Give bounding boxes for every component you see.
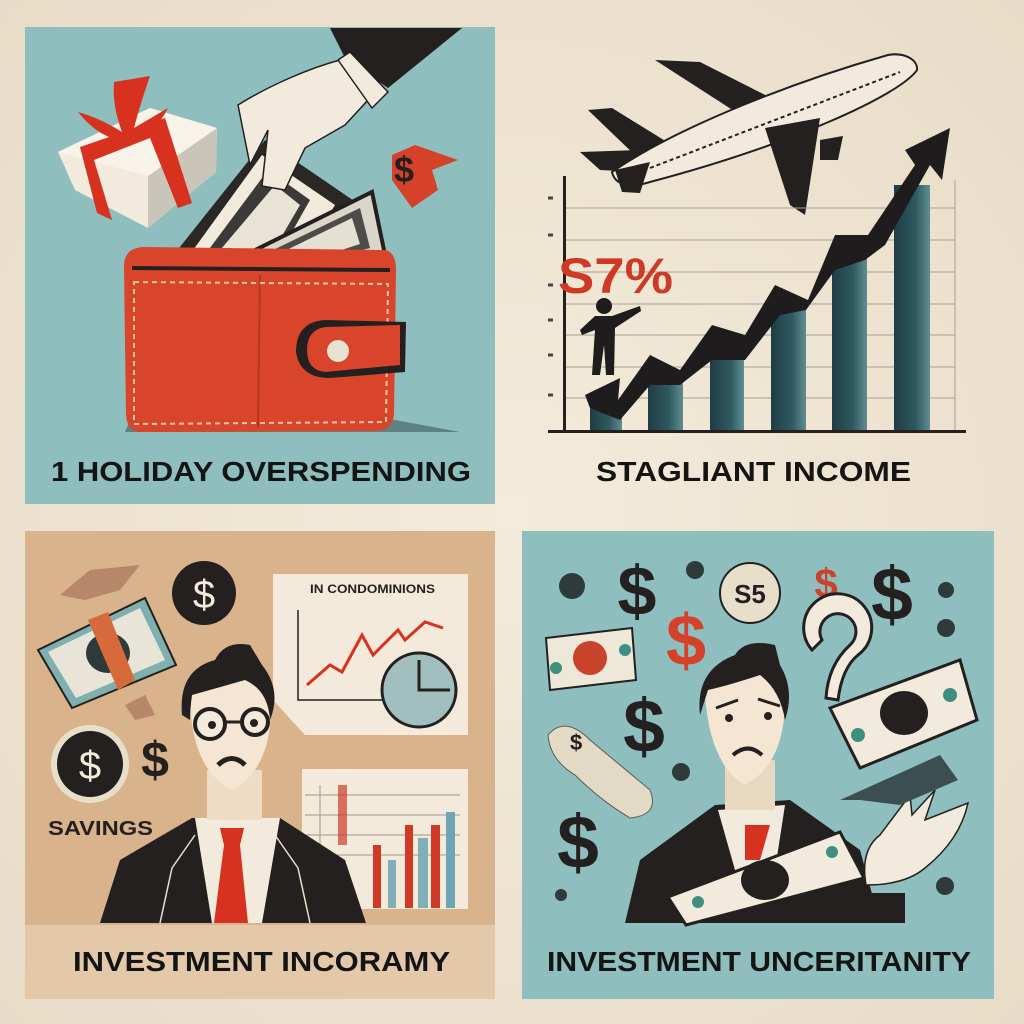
figure: worried man with glasses [100,644,366,923]
icon: red dollar sign: $ [394,149,414,190]
icon: coin [720,563,780,623]
icon: money bundle [38,598,176,708]
panel: investment uncertainty [522,531,994,999]
icons: dollar signs: $ [666,601,706,681]
panel: investment inflation [25,531,495,999]
icons: dollar signs: $ [814,560,838,607]
icons: dollar signs: $ [557,800,599,884]
icon: scattered notes [840,755,958,805]
icon: dollar coin: $ [193,573,215,617]
icon: question mark [804,594,872,700]
icons: scattered marks [555,561,955,901]
icon: hand with coin: $ [570,730,582,755]
figure: worried man [625,643,880,923]
heading: investment uncertainty: INVESTMENT UNCERITANITY [547,946,971,977]
icon: hand with coin [548,726,652,818]
icon: open hand [845,790,968,923]
heading: stagnant income: STAGLIANT INCOME [596,456,911,487]
chart: line chart with clock: IN CONDOMINIONS [310,582,435,596]
label: savings: SAVINGS [48,818,153,840]
icon: standing figure [580,298,641,375]
icons: dollar signs: $ [623,684,665,768]
heading: investment incoramy: INVESTMENT INCORAMY [73,946,450,977]
icon: scattered bills [60,565,155,720]
icon: dollar coin [172,561,236,625]
heading: holiday overspending: 1 HOLIDAY OVERSPENDING [51,456,471,487]
icon: red wallet [124,247,460,432]
icon: dollar sign: $ [141,732,169,788]
icons: dollar signs: $ [871,552,913,636]
panel: stagnant income [548,54,966,487]
icon: banknote right [830,660,977,768]
icon: red dollar sign [392,145,458,208]
icons: dollar signs: $ [618,552,656,630]
chart: bar chart [302,769,468,909]
icon: airplane [580,54,917,215]
icon: savings coin: $ [79,744,101,788]
panel: holiday overspending [25,27,495,504]
icon: hand with cash [160,28,462,272]
chart: line chart with clock [273,574,468,735]
icon: gift box [58,76,217,228]
icons: dollar signs [557,552,913,884]
icon: coin: S5 [734,579,766,609]
icon: savings coin [51,725,129,803]
label: percentage: S7% [558,248,673,304]
chart: rising bars and arrow [548,128,966,433]
icon: banknote left [546,628,636,690]
icon: banknote front [668,832,864,925]
